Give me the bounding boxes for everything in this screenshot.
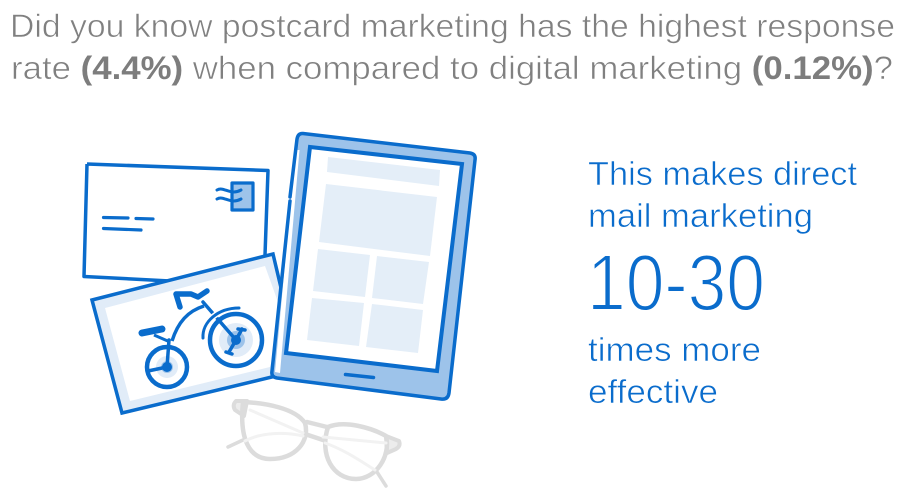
icon: postcard with bicycle <box>92 254 291 413</box>
icon: envelope <box>84 164 268 281</box>
icon: bicycle <box>142 291 262 387</box>
callout <box>587 155 857 410</box>
callout: times more <box>588 331 761 368</box>
title: rate (4.4%) when compared to digital marketing (0.12%) ? <box>11 50 893 86</box>
callout: mail marketing <box>588 197 813 234</box>
icon: tablet <box>272 133 475 399</box>
title: Did you know postcard marketing has the highest response <box>10 8 895 44</box>
illustration <box>84 133 475 486</box>
callout: effective <box>588 373 718 410</box>
callout: This makes direct <box>588 155 857 192</box>
title <box>10 8 895 86</box>
icon: glasses <box>228 401 400 486</box>
callout: 10-30 <box>587 238 765 327</box>
